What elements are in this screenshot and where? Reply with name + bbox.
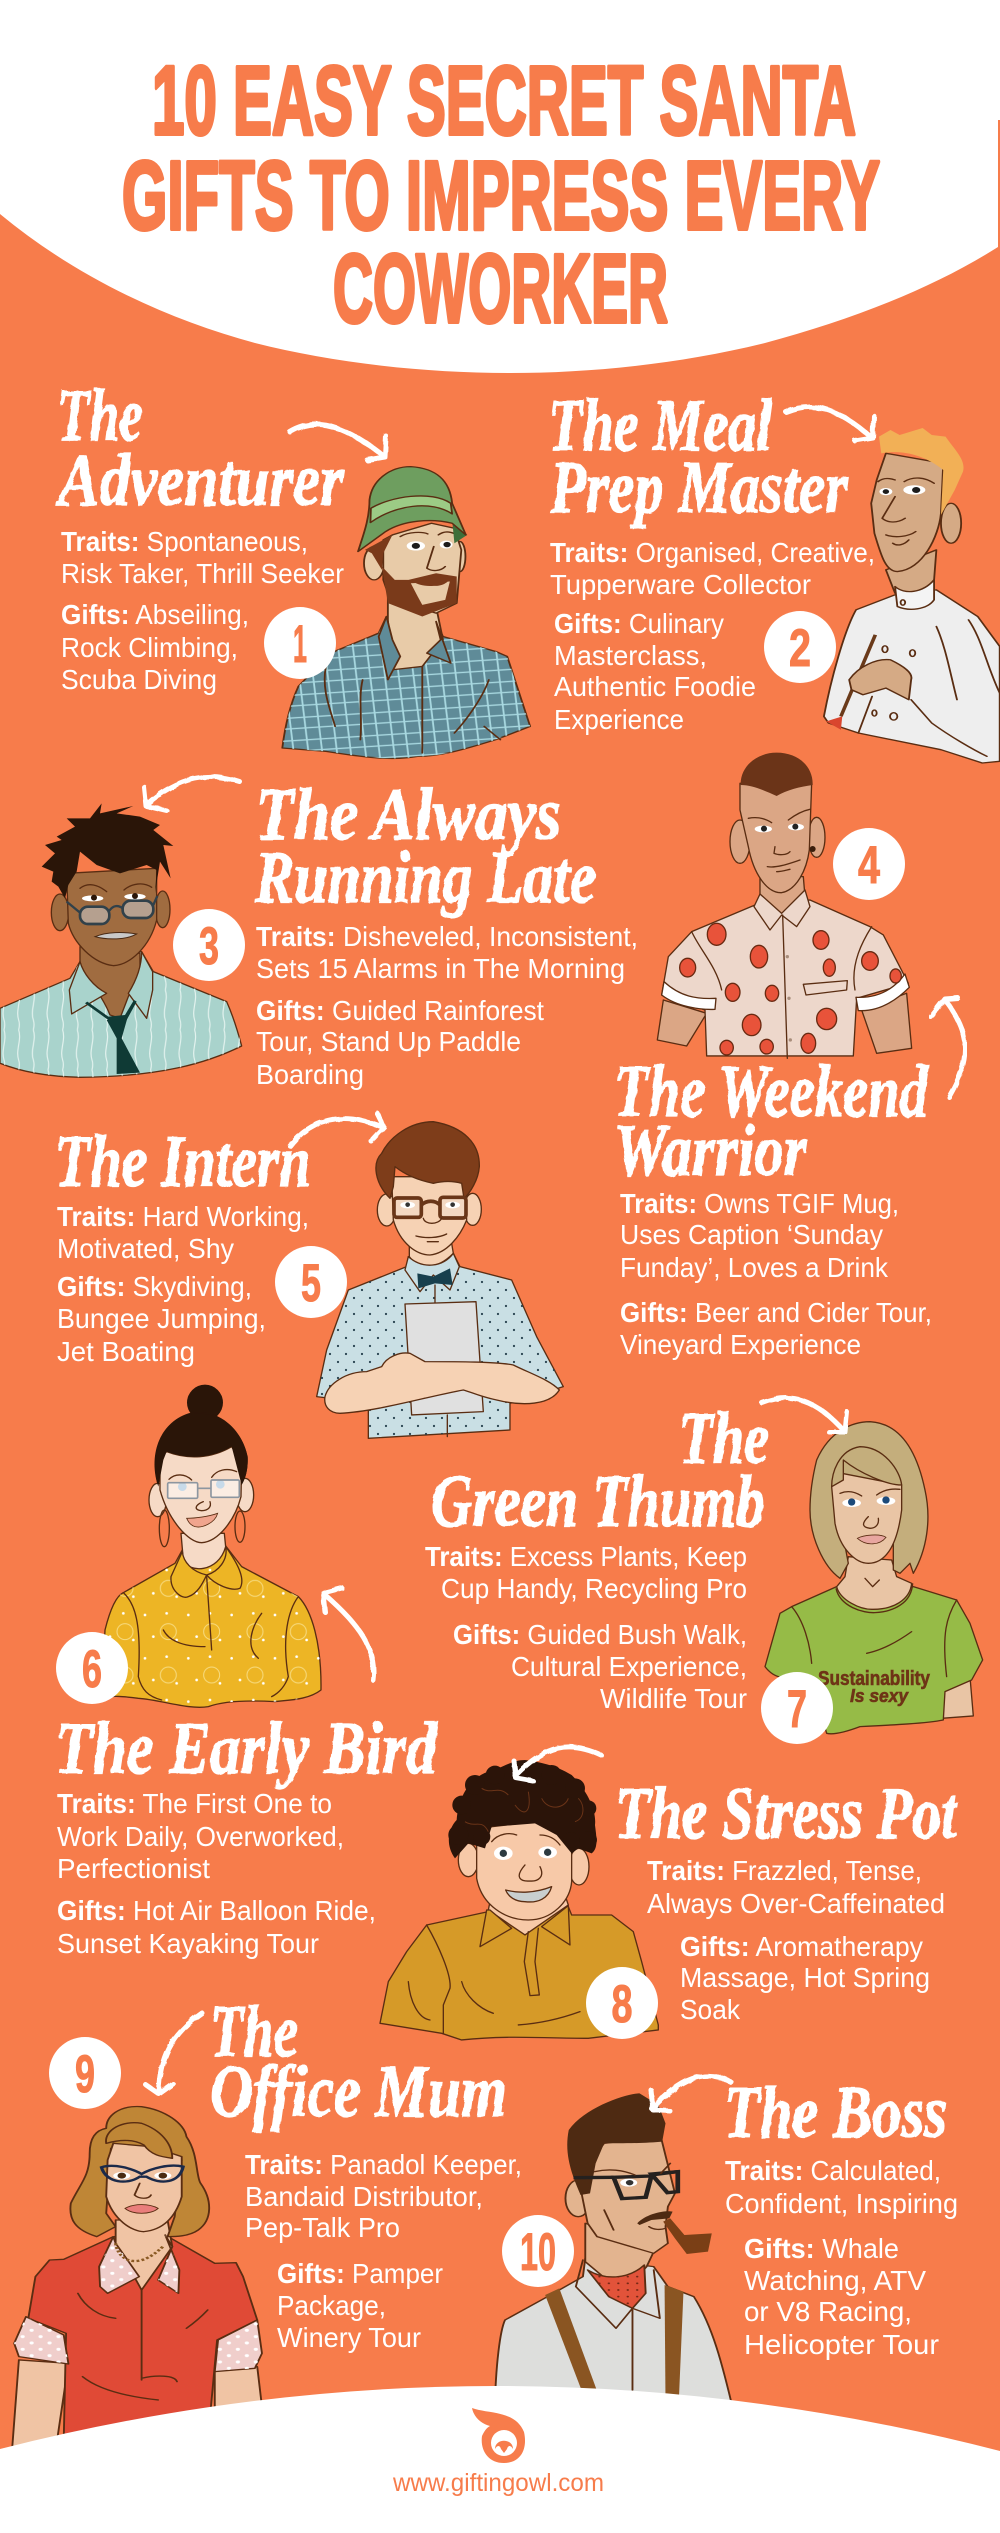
number badge 2: 2 [789,619,811,678]
panel: the green thumb [425,1398,983,1744]
character: weekend warrior [657,753,912,1058]
traits: Tupperware Collector [550,569,811,600]
gifts: Gifts: Hot Air Balloon Ride, [57,1895,376,1926]
gifts: Wildlife Tour [600,1683,747,1714]
gifts: Bungee Jumping, [57,1303,266,1334]
heading: The Intern [55,1121,311,1203]
panel: the early bird [55,1385,438,1959]
traits [647,1855,945,1919]
number badge 2 [764,611,836,683]
gifts: Watching, ATV [744,2265,926,2296]
traits: Traits: Excess Plants, Keep [425,1541,747,1572]
heading [431,1398,769,1543]
gifts: Gifts: Skydiving, [57,1271,252,1302]
heading: The Meal [548,385,772,467]
traits: Pep-Talk Pro [245,2212,400,2243]
panel: the meal prep master [548,385,1000,763]
traits: Traits: Spontaneous, [61,526,308,557]
traits: Sets 15 Alarms in The Morning [256,953,625,984]
gifts [57,1895,376,1959]
traits [256,921,638,984]
character: green thumb: Is sexy [850,1686,909,1706]
arrow [514,1747,601,1781]
gifts: Gifts: Pamper [277,2258,443,2289]
number badge 8 [586,1967,658,2039]
traits: Traits: Calculated, [725,2155,941,2186]
heading [254,774,596,919]
gifts [554,608,756,735]
heading [614,1051,929,1192]
number badge 4 [833,828,905,900]
heading: Prep Master [549,447,849,529]
gifts: Helicopter Tour [744,2329,939,2360]
heading: The [679,1398,769,1480]
gifts: Massage, Hot Spring [680,1962,930,1993]
gifts: Gifts: Guided Rainforest [256,995,544,1026]
traits: Traits: Owns TGIF Mug, [620,1188,899,1219]
gifts: Gifts: Guided Bush Walk, [453,1619,747,1650]
heading [210,1991,507,2133]
number badge 5: 5 [301,1254,321,1313]
traits: Perfectionist [57,1853,210,1884]
heading: The Early Bird [55,1708,438,1790]
heading: The Boss [724,2072,947,2154]
footer white curved panel [0,2386,1000,2533]
panel: the office mum [12,1991,522,2453]
character: chef [824,428,1000,763]
number badge 10: 10 [520,2223,556,2282]
heading: Green Thumb [431,1461,765,1543]
gifts: Jet Boating [57,1336,195,1367]
number badge 10 [502,2215,574,2287]
character: office mum [12,2107,262,2453]
character: adventurer [282,467,530,758]
title [122,46,880,343]
panel: the intern [55,1113,563,1438]
number badge 5 [275,1246,347,1318]
heading: Running Late [254,837,596,919]
traits: Uses Caption ‘Sunday [620,1219,883,1250]
gifts: Experience [554,704,684,735]
character: late [0,803,242,1077]
number badge 8: 8 [612,1975,632,2034]
heading [548,385,849,529]
number badge 3 [173,909,245,981]
gifts: Vineyard Experience [620,1329,861,1360]
gifts [453,1619,747,1714]
number badge 1 [264,607,336,679]
gifts: Cultural Experience, [511,1651,747,1682]
traits [61,526,344,589]
traits [725,2155,958,2219]
traits: Traits: Organised, Creative, [550,537,875,568]
header white curved panel [0,0,1000,373]
number badge 7: 7 [787,1680,807,1739]
heading: The [210,1991,298,2073]
gifts: Masterclass, [554,640,707,671]
gifts: Winery Tour [277,2322,421,2353]
gifts: Authentic Foodie [554,671,756,702]
gifts: Soak [680,1994,741,2025]
gifts [256,995,544,1090]
gifts [680,1931,930,2025]
arrow [651,2076,731,2111]
gifts: Gifts: Whale [744,2233,899,2264]
gifts: Package, [277,2290,386,2321]
heading: Warrior [614,1110,808,1192]
arrow [931,998,965,1097]
traits [245,2149,522,2243]
number badge 9: 9 [75,2045,95,2104]
traits: Motivated, Shy [57,1233,234,1264]
arrow [146,2013,202,2094]
arrow [762,1398,847,1432]
traits: Traits: Panadol Keeper, [245,2149,522,2180]
gifts: Scuba Diving [61,664,217,695]
gifts [744,2233,939,2360]
gifts: Gifts: Aromatherapy [680,1931,923,1962]
gifts [620,1297,932,1360]
arrow [290,424,386,460]
title: COWORKER [333,234,668,343]
gifts [61,599,249,695]
traits: Cup Handy, Recycling Pro [441,1573,747,1604]
gifts: Boarding [256,1059,364,1090]
traits: Traits: Disheveled, Inconsistent, [256,921,638,952]
heading: The Always [255,774,561,856]
gifts: Gifts: Beer and Cider Tour, [620,1297,932,1328]
arrow [323,1588,374,1680]
gifts: Gifts: Abseiling, [61,599,249,630]
gifts [277,2258,443,2353]
character: stress pot [380,1760,658,2040]
traits: Work Daily, Overworked, [57,1821,344,1852]
traits [425,1541,747,1604]
number badge 6: 6 [82,1640,102,1699]
character: boss [495,2093,734,2413]
traits: Traits: Hard Working, [57,1201,309,1232]
character: green thumb: Sustainability [818,1668,931,1690]
arrow [786,407,874,441]
traits: Risk Taker, Thrill Seeker [61,558,344,589]
number badge 6 [56,1632,128,1704]
panel: the stress pot [380,1747,959,2040]
icon: gifting owl logo [472,2408,525,2463]
traits [57,1201,309,1264]
gifts: or V8 Racing, [744,2296,912,2327]
gifts: Sunset Kayaking Tour [57,1928,319,1959]
arrow [290,1113,384,1146]
traits [620,1188,899,1283]
panel: the weekend warrior [614,753,965,1360]
number badge 3: 3 [199,917,219,976]
character: early bird [102,1385,321,1707]
arrow [144,777,240,811]
heading [56,375,345,522]
traits: Funday’, Loves a Drink [620,1252,889,1283]
traits: Traits: The First One to [57,1788,332,1819]
traits: Always Over-Caffeinated [647,1888,945,1919]
traits [550,537,875,600]
character: intern [317,1122,563,1438]
number badge 7 [761,1672,833,1744]
heading: The [57,375,143,457]
gifts: Gifts: Culinary [554,608,724,639]
traits: Traits: Frazzled, Tense, [647,1855,922,1886]
traits: Confident, Inspiring [725,2188,958,2219]
character: green thumb [765,1422,983,1734]
heading: Adventurer [56,440,345,522]
number badge 9 [49,2037,121,2109]
panel: the always running late [0,774,638,1090]
traits: Bandaid Distributor, [245,2181,483,2212]
number badge 1: 1 [293,615,307,674]
panel: the adventurer [56,375,530,758]
gifts [57,1271,266,1367]
gifts: Tour, Stand Up Paddle [256,1026,521,1057]
traits [57,1788,344,1884]
website url: www.giftingowl.com [392,2469,604,2497]
panel: the boss [495,2072,958,2413]
gifts: Rock Climbing, [61,632,238,663]
number badge 4: 4 [858,836,880,895]
heading: Office Mum [210,2051,507,2133]
